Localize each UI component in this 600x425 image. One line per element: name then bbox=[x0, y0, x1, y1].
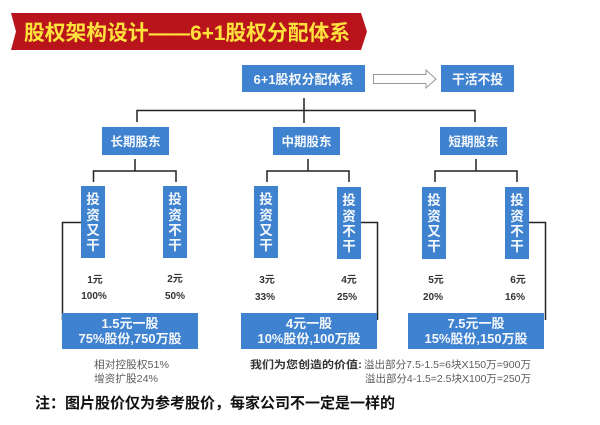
price 6 bbox=[505, 274, 526, 303]
invest and work box 1: 又 bbox=[86, 223, 100, 238]
invest no work box 4 bbox=[337, 187, 361, 259]
top tree connector bbox=[137, 98, 475, 123]
invest and work box 5: 投 bbox=[427, 192, 441, 208]
invest and work box 1: 投 bbox=[86, 191, 100, 207]
price 2: 2元 bbox=[167, 273, 183, 285]
invest and work box 5: 又 bbox=[427, 224, 441, 239]
mid-term connector bbox=[267, 159, 349, 182]
invest no work box 4: 投 bbox=[342, 192, 356, 208]
panel: mid-term shareholders bbox=[254, 127, 361, 303]
connector long-term to share box bbox=[62, 222, 81, 320]
value calculation bbox=[364, 358, 531, 385]
long-term heading: 长期股东 bbox=[110, 134, 161, 149]
invest no work box 4: 资 bbox=[342, 209, 356, 224]
mid-term heading: 中期股东 bbox=[281, 134, 332, 149]
price 2: 50% bbox=[165, 291, 185, 302]
invest no work box 6 bbox=[505, 187, 529, 259]
invest and work box 5 bbox=[422, 187, 446, 259]
top box: 6+1 system bbox=[242, 65, 365, 92]
invest no work box 2 bbox=[163, 186, 187, 258]
invest no work box 2: 资 bbox=[168, 208, 182, 223]
price 5: 20% bbox=[423, 292, 443, 303]
invest no work box 2: 不 bbox=[168, 223, 182, 238]
result box: long-term bbox=[62, 313, 198, 349]
mid-term heading bbox=[273, 127, 340, 155]
short-term connector bbox=[435, 159, 517, 182]
invest no work box 6: 资 bbox=[510, 209, 524, 224]
result box: long-term: 75%股份,750万股 bbox=[78, 331, 182, 346]
price 1: 1元 bbox=[87, 274, 103, 286]
result box: mid-term: 4元一股 bbox=[286, 316, 332, 331]
invest and work box 3: 投 bbox=[259, 191, 273, 207]
price 6: 6元 bbox=[510, 274, 526, 286]
price 5 bbox=[423, 274, 444, 303]
panel: long-term shareholders bbox=[81, 127, 187, 302]
note: control share: 增资扩股24% bbox=[94, 372, 158, 385]
arrow to work-no-invest bbox=[374, 70, 436, 88]
invest and work box 3: 又 bbox=[259, 223, 273, 238]
title banner bbox=[11, 13, 367, 50]
result box: short-term bbox=[408, 313, 544, 349]
top box: 6+1 system: 6+1股权分配体系 bbox=[254, 72, 354, 87]
invest and work box 3 bbox=[254, 186, 278, 258]
value calculation: 溢出部分7.5-1.5=6块X150万=900万 bbox=[364, 358, 531, 371]
note: control share bbox=[94, 358, 169, 385]
result box: long-term: 1.5元一股 bbox=[101, 316, 159, 331]
invest no work box 2: 投 bbox=[168, 191, 182, 207]
price 3: 33% bbox=[255, 292, 275, 303]
invest and work box 1: 干 bbox=[86, 238, 100, 253]
long-term heading bbox=[102, 127, 169, 155]
invest no work box 4: 不 bbox=[342, 224, 356, 239]
value calculation: 溢出部分4-1.5=2.5块X100万=250万 bbox=[365, 372, 531, 385]
invest and work box 5: 资 bbox=[427, 209, 441, 224]
price 4: 25% bbox=[337, 292, 357, 303]
connector short-term to share box bbox=[529, 222, 546, 320]
price 5: 5元 bbox=[428, 274, 444, 286]
invest no work box 6: 不 bbox=[510, 224, 524, 239]
short-term heading: 短期股东 bbox=[448, 134, 499, 149]
price 1: 100% bbox=[81, 291, 107, 302]
short-term heading bbox=[440, 127, 507, 155]
value label: 我们为您创造的价值: bbox=[250, 358, 362, 371]
title banner: 股权架构设计——6+1股权分配体系 bbox=[24, 22, 350, 45]
result box: short-term: 7.5元一股 bbox=[447, 316, 505, 331]
invest and work box 1 bbox=[81, 186, 105, 258]
note: control share: 相对控股权51% bbox=[94, 358, 169, 371]
result box: mid-term bbox=[241, 313, 377, 349]
invest no work box 4: 干 bbox=[342, 239, 356, 254]
invest and work box 3: 资 bbox=[259, 208, 273, 223]
invest no work box 2: 干 bbox=[168, 238, 182, 253]
invest and work box 3: 干 bbox=[259, 238, 273, 253]
price 2 bbox=[165, 273, 185, 302]
result box: mid-term: 10%股份,100万股 bbox=[258, 331, 361, 346]
price 4: 4元 bbox=[341, 274, 357, 286]
box: work without investing: 干活不投 bbox=[452, 72, 503, 87]
connector mid-term to share box bbox=[361, 222, 378, 320]
price 1 bbox=[81, 274, 107, 302]
result box: short-term: 15%股份,150万股 bbox=[424, 331, 528, 346]
panel: short-term shareholders bbox=[422, 127, 529, 303]
footnote: 注：图片股价仅为参考股价，每家公司不一定是一样的 bbox=[35, 394, 395, 412]
invest and work box 5: 干 bbox=[427, 239, 441, 254]
price 6: 16% bbox=[505, 292, 525, 303]
invest no work box 6: 干 bbox=[510, 239, 524, 254]
invest no work box 6: 投 bbox=[510, 192, 524, 208]
invest and work box 1: 资 bbox=[86, 208, 100, 223]
price 4 bbox=[337, 274, 357, 303]
price 3: 3元 bbox=[259, 274, 275, 286]
price 3 bbox=[255, 274, 275, 303]
box: work without investing bbox=[441, 65, 514, 92]
long-term connector bbox=[94, 159, 176, 182]
